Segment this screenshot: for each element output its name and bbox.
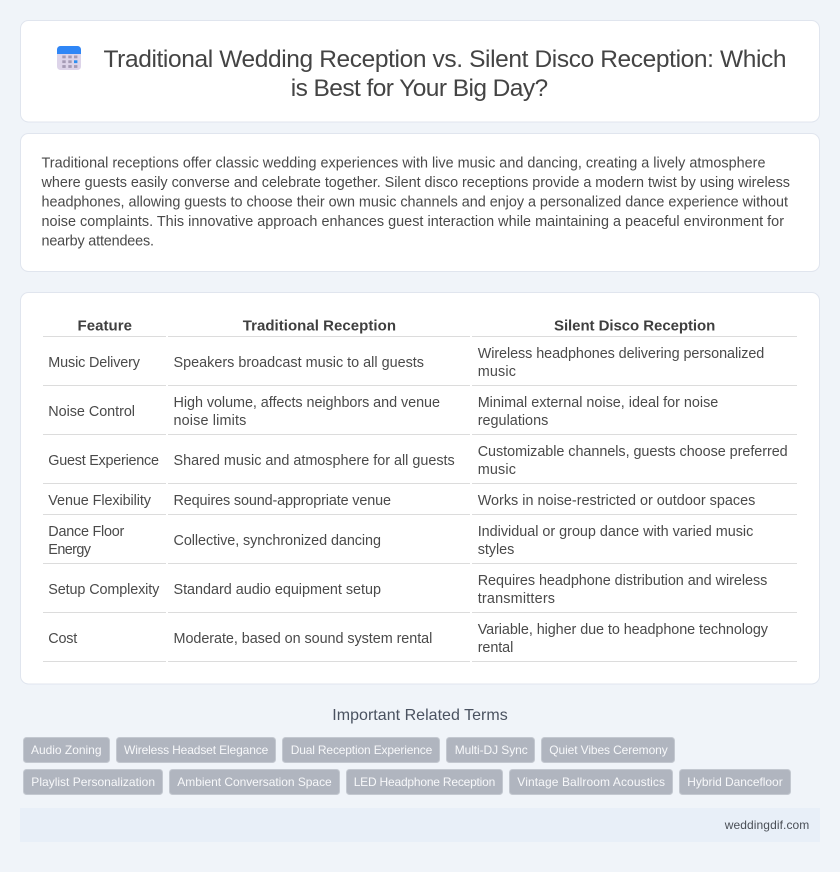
panel: introduction	[20, 134, 820, 272]
footer	[20, 808, 820, 842]
text block: introduction paragraph: nearby attendees.	[42, 234, 154, 250]
row: music delivery: Music Delivery	[48, 355, 141, 371]
row: guest experience: Customizable channels, guests choose preferred	[478, 444, 788, 460]
table header row: Feature	[78, 318, 132, 334]
row: noise control: High volume, affects neighbors and venue	[174, 395, 440, 411]
tag: ambient conversation space	[170, 770, 340, 794]
row: noise control	[48, 395, 718, 429]
text block: introduction paragraph: where guests easily converse and celebrate together. Silent disco receptions provide a modern twist by using wireless	[40, 175, 790, 191]
row: setup complexity: Setup Complexity	[48, 582, 160, 598]
row: setup complexity: Standard audio equipment setup	[174, 582, 381, 598]
text block: introduction paragraph: headphones, allowing guests to choose their own music channels and enjoy a personalized dance experience without	[42, 194, 788, 210]
row: setup complexity: transmitters	[478, 591, 555, 607]
title: Traditional Wedding Reception vs. Silent Disco Reception: Which	[104, 46, 786, 73]
table header row: Silent Disco Reception	[554, 318, 715, 334]
tag: audio zoning	[24, 738, 110, 762]
tags: related terms	[24, 738, 790, 794]
tag: wireless headset elegance	[116, 738, 276, 762]
table header row	[78, 318, 715, 334]
row: venue flexibility	[48, 493, 755, 509]
tag: dual reception experience	[282, 738, 440, 762]
tag: dual reception experience: Dual Reception Experience	[291, 743, 433, 757]
table header row: Traditional Reception	[243, 318, 396, 334]
row: music delivery: Speakers broadcast music to all guests	[174, 355, 424, 371]
row: venue flexibility: Requires sound-appropriate venue	[174, 493, 391, 509]
tag: quiet vibes ceremony: Quiet Vibes Ceremony	[549, 743, 668, 757]
heading: related terms: Important Related Terms	[332, 707, 508, 724]
row: guest experience: Shared music and atmosphere for all guests	[174, 453, 455, 469]
tag: quiet vibes ceremony	[542, 738, 674, 762]
panel: comparison table	[20, 292, 820, 684]
tag: ambient conversation space: Ambient Conversation Space	[177, 775, 332, 789]
row: cost: Moderate, based on sound system rental	[174, 631, 432, 647]
tag: vintage ballroom acoustics	[510, 770, 672, 794]
text block: introduction paragraph: noise complaints. This innovative approach enhances guest interaction while maintaining a peaceful environment for	[42, 214, 784, 230]
row: noise control: noise limits	[174, 413, 246, 429]
row: dance floor energy: styles	[478, 542, 514, 558]
tag: playlist personalization: Playlist Personalization	[31, 775, 155, 789]
row: cost	[48, 622, 769, 656]
tag: led headphone reception: LED Headphone Reception	[354, 775, 495, 789]
tag: led headphone reception	[346, 770, 502, 794]
row: dance floor energy: Dance Floor	[48, 524, 125, 540]
row: cost: Cost	[48, 631, 77, 647]
title	[104, 46, 786, 102]
tag: playlist personalization	[24, 770, 162, 794]
row: guest experience	[48, 444, 788, 478]
row: cost: Variable, higher due to headphone technology	[478, 622, 769, 638]
tag: hybrid dancefloor	[680, 770, 790, 794]
tag: audio zoning: Audio Zoning	[31, 743, 102, 757]
icon: calendar	[57, 46, 81, 70]
row: venue flexibility: Works in noise-restricted or outdoor spaces	[478, 493, 755, 509]
text block: introduction paragraph	[40, 156, 790, 250]
tag: multi-dj sync: Multi-DJ Sync	[455, 743, 528, 757]
row: setup complexity	[48, 573, 767, 607]
tag: wireless headset elegance: Wireless Headset Elegance	[124, 743, 269, 757]
row: dance floor energy: Energy	[48, 542, 92, 558]
row: guest experience: music	[478, 462, 516, 478]
row: dance floor energy: Individual or group dance with varied music	[478, 524, 753, 540]
tag: vintage ballroom acoustics: Vintage Ballroom Acoustics	[517, 775, 665, 789]
row: music delivery	[48, 346, 764, 380]
row: dance floor energy: Collective, synchronized dancing	[174, 533, 381, 549]
panel: title header	[20, 20, 820, 122]
row: dance floor energy	[48, 524, 753, 558]
row: guest experience: Guest Experience	[48, 453, 159, 469]
tag: multi-dj sync	[446, 738, 534, 762]
row: music delivery: music	[478, 364, 516, 380]
row: noise control: Minimal external noise, ideal for noise	[478, 395, 718, 411]
row: music delivery: Wireless headphones delivering personalized	[478, 346, 764, 362]
row: cost: rental	[478, 640, 513, 656]
text block: introduction paragraph: Traditional receptions offer classic wedding experiences with live music and dancing, creating a lively atmosphere	[42, 156, 766, 172]
footer: weddingdif.com	[724, 818, 809, 832]
row: noise control: Noise Control	[48, 404, 135, 420]
title: is Best for Your Big Day?	[291, 75, 548, 102]
tag: hybrid dancefloor: Hybrid Dancefloor	[687, 775, 783, 789]
row: venue flexibility: Venue Flexibility	[48, 493, 152, 509]
row: noise control: regulations	[478, 413, 548, 429]
row: setup complexity: Requires headphone distribution and wireless	[478, 573, 767, 589]
